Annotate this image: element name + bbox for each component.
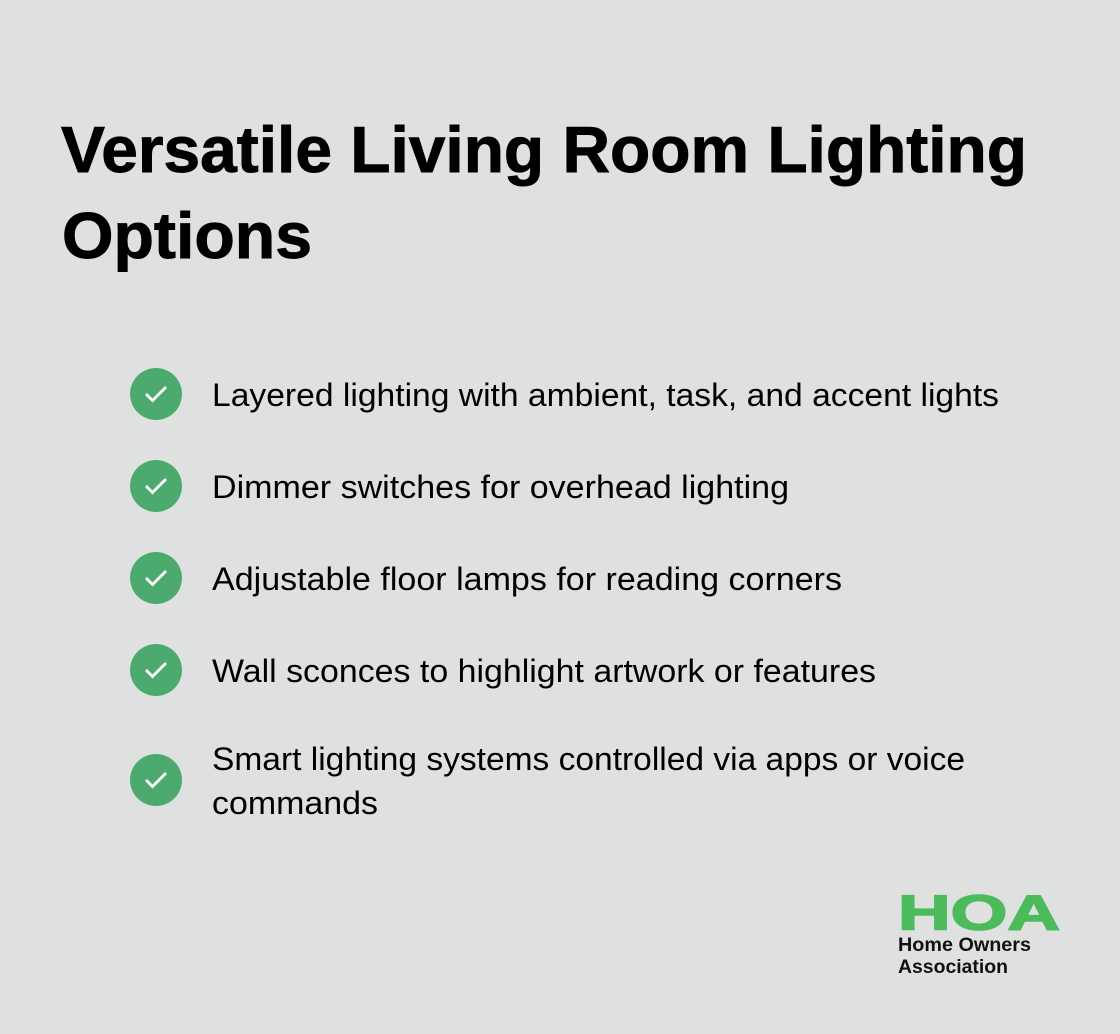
logo: Home Owners Association [898, 886, 1060, 978]
logo: Home Owners Association: Home Owners [898, 935, 1031, 956]
list item: layered lighting: Layered lighting with ambient, task, and accent lights [212, 377, 999, 413]
logo: Home Owners Association: Association [898, 957, 1008, 978]
title: Versatile Living Room Lighting [61, 113, 1027, 186]
logo: Home Owners Association: HOA [898, 886, 1060, 940]
list item: wall sconces: Wall sconces to highlight artwork or features [212, 653, 876, 689]
list item: smart lighting [130, 741, 965, 821]
title: Options [62, 199, 312, 272]
list item: layered lighting [130, 368, 999, 420]
list item: floor lamps: Adjustable floor lamps for reading corners [212, 561, 842, 597]
list item: dimmer switches: Dimmer switches for overhead lighting [212, 469, 789, 505]
list item: floor lamps [130, 552, 842, 604]
title [61, 113, 1027, 272]
list item: smart lighting: commands [212, 785, 378, 821]
list item: smart lighting: Smart lighting systems controlled via apps or voice [212, 741, 965, 777]
list item: wall sconces [130, 644, 876, 696]
list item: dimmer switches [130, 460, 789, 512]
checklist [130, 368, 999, 821]
